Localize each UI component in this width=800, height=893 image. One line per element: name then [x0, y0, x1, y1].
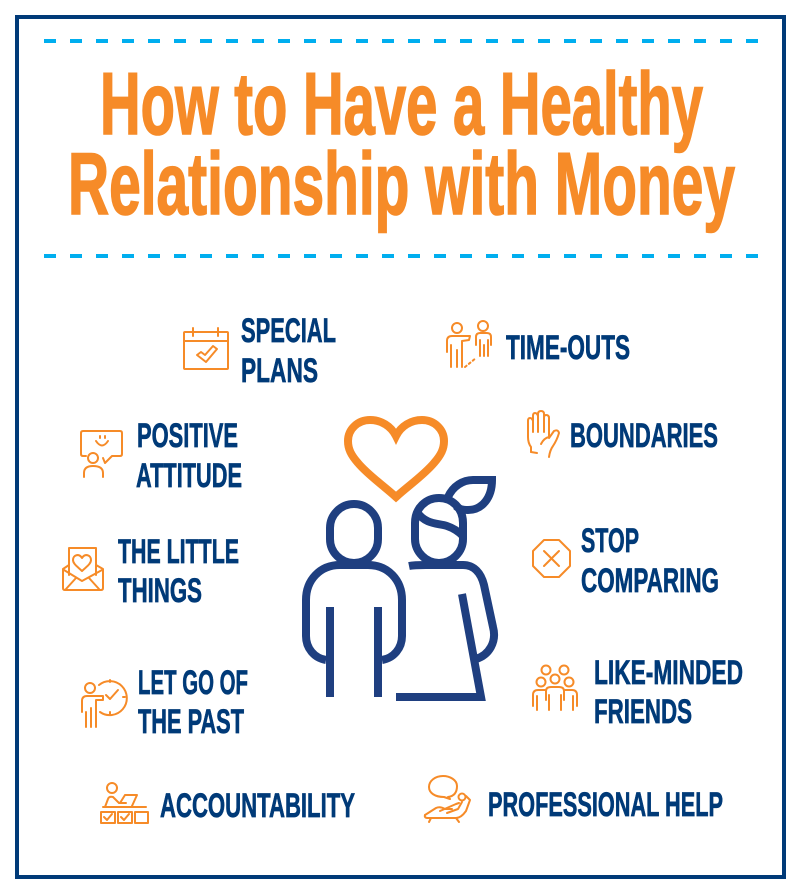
item: the little things: THE LITTLE	[118, 533, 239, 571]
item: like-minded friends: FRIENDS	[594, 693, 692, 731]
item: accountability	[101, 783, 355, 825]
item: time-outs	[447, 321, 630, 367]
icon: woman	[396, 480, 494, 697]
item: special plans: SPECIAL	[241, 312, 336, 350]
item: stop comparing	[533, 522, 719, 600]
icon: smiling speech bubble	[81, 431, 122, 477]
icon: speech bubble and couch	[425, 776, 470, 822]
item: boundaries	[528, 411, 718, 457]
central couple illustration	[306, 420, 494, 697]
icon: person at laptop with checklist	[101, 783, 148, 823]
item: let go of the past: THE PAST	[138, 703, 244, 741]
item: positive attitude	[81, 417, 242, 495]
item: accountability: ACCOUNTABILITY	[160, 787, 355, 825]
item: like-minded friends	[533, 654, 743, 731]
icon: heart	[348, 420, 444, 497]
title	[68, 54, 735, 233]
item: positive attitude: ATTITUDE	[136, 457, 242, 495]
icon: calendar	[184, 328, 228, 369]
item: let go of the past: LET GO OF	[138, 664, 248, 702]
item: let go of the past	[82, 664, 248, 741]
item: the little things	[63, 533, 239, 610]
item: positive attitude: POSITIVE	[137, 417, 238, 455]
icon: love letter envelope	[63, 548, 103, 590]
item: time-outs: TIME-OUTS	[506, 329, 630, 367]
icon: raised hand	[528, 411, 559, 457]
icon: group of people	[533, 666, 577, 710]
item: special plans: PLANS	[241, 352, 318, 390]
item: special plans	[184, 312, 336, 390]
item: stop comparing: STOP	[581, 522, 639, 560]
item: the little things: THINGS	[118, 572, 202, 610]
icon: person and clock	[82, 680, 127, 727]
icon: two people	[447, 321, 491, 367]
icon: stop sign	[533, 540, 570, 577]
item: professional help	[425, 776, 723, 824]
item: boundaries: BOUNDARIES	[570, 417, 718, 455]
item: stop comparing: COMPARING	[581, 562, 719, 600]
icon: man	[306, 504, 402, 697]
